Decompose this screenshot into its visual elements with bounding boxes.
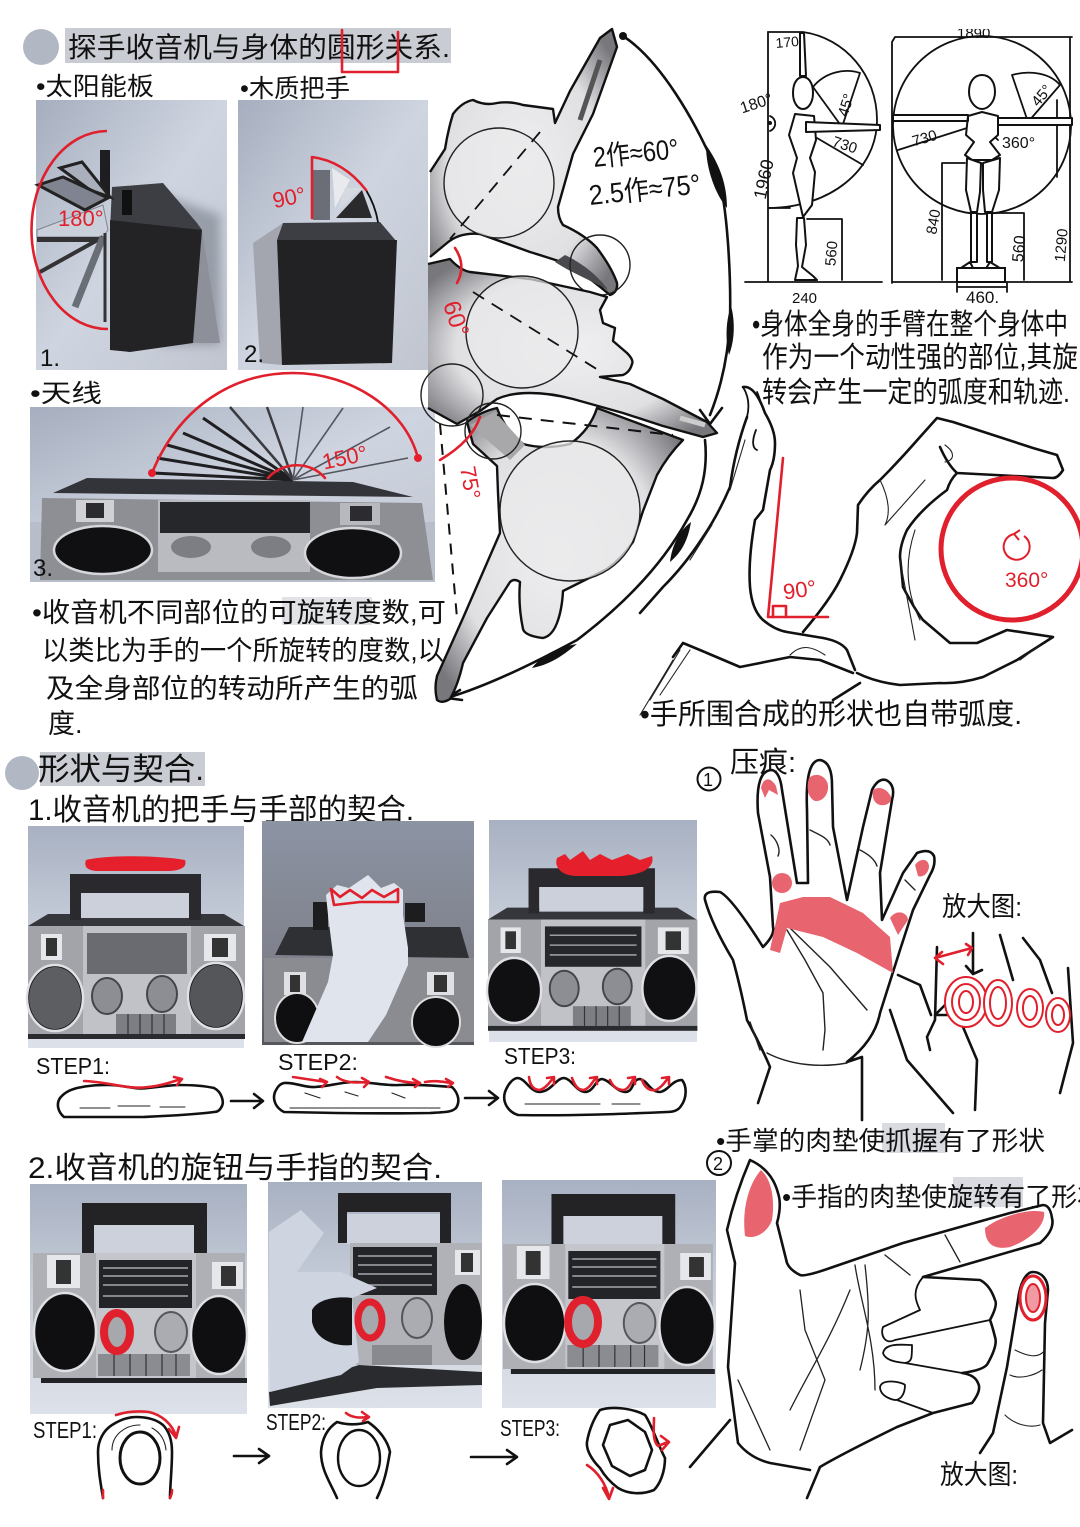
hand drawing: middle hand bbox=[421, 248, 717, 437]
dimension labels side view: 45° bbox=[835, 92, 858, 119]
arrow knob step 2 to 3 bbox=[471, 1450, 517, 1464]
label: enlarged view 2: 放大图: bbox=[940, 1460, 1018, 1490]
hand drawing: L-shaped and circle-shaped hand bbox=[640, 387, 1080, 715]
photo 1: solar panel rotation bbox=[31, 100, 227, 372]
diagram: mannequin front view bbox=[892, 18, 1072, 307]
subheading 1: 1.收音机的把手与手部的契合. bbox=[28, 794, 414, 827]
text block: radio rotation analogy bbox=[32, 597, 446, 739]
step 3 label and knob shape bbox=[500, 1408, 669, 1499]
label: wooden handle: •木质把手 bbox=[240, 75, 350, 103]
step 3 label and shape bbox=[504, 1043, 686, 1115]
label: antenna: •天线 bbox=[30, 380, 102, 408]
step 3 label and knob shape: STEP3: bbox=[500, 1415, 560, 1441]
dimension labels front view: 360° bbox=[1002, 135, 1035, 152]
text block: radio rotation analogy: •收音机不同部位的可旋转度数,可 bbox=[32, 598, 446, 628]
subheading 2: 2.收音机的旋钮与手指的契合. bbox=[28, 1152, 442, 1185]
dimension labels side view: 240 bbox=[792, 290, 817, 307]
diagram: mannequin front view: 1890 bbox=[957, 25, 990, 42]
angle 180: 180° bbox=[58, 206, 104, 231]
section heading: hand and radio circular relationship: 探手收音机与身体的圆形关系. bbox=[68, 32, 450, 63]
step 2 label and knob shape bbox=[266, 1409, 390, 1498]
label: pressure marks: 压痕: bbox=[730, 746, 796, 779]
dimension labels side view: 1960 bbox=[750, 158, 778, 201]
label: enlarged view: 放大图: bbox=[942, 892, 1022, 922]
label: pressure marks bbox=[698, 746, 796, 790]
hand drawing: bottom hand bbox=[436, 403, 683, 702]
label: pressure marks: 1 bbox=[703, 770, 713, 790]
hand drawing: palm with pressure marks bbox=[705, 760, 934, 1120]
text block: radio rotation analogy: 及全身部位的转动所产生的弧 bbox=[46, 674, 418, 704]
dimension labels front view: 1290 bbox=[1052, 228, 1072, 263]
photo number 1: 1. bbox=[40, 345, 60, 372]
photo: handle step 2 bbox=[262, 821, 474, 1047]
step 1 label and knob shape: STEP1: bbox=[33, 1417, 97, 1443]
section heading: shape and fit: 形状与契合. bbox=[38, 752, 204, 787]
angle 150: 150° bbox=[320, 441, 370, 474]
diagram: mannequin side view bbox=[738, 32, 882, 307]
dimension labels front view: 840 bbox=[923, 208, 944, 236]
label: number 2: 2 bbox=[713, 1154, 723, 1174]
arrow step 2 to 3 bbox=[465, 1091, 498, 1105]
photo: handle step 3 bbox=[487, 820, 697, 1042]
text: palm pads give grip shape: •手掌的肉垫使抓握有了形状 bbox=[716, 1126, 1045, 1156]
note: finger rotation degrees: 2.5作≈75° bbox=[587, 168, 702, 211]
note: finger rotation degrees bbox=[587, 133, 702, 211]
dimension labels front view: 560 bbox=[1010, 235, 1029, 263]
angle 90: 90° bbox=[270, 182, 308, 213]
text block: radio rotation analogy: 度. bbox=[48, 709, 83, 739]
dimension labels front view: 45° bbox=[1028, 82, 1056, 110]
caption: hand-enclosed shape: •手所围合成的形状也自带弧度. bbox=[640, 698, 1022, 731]
dimension labels front view: 730 bbox=[910, 127, 939, 150]
hand drawing: enlarged fingertip bbox=[980, 1272, 1072, 1453]
dimension labels side view bbox=[738, 33, 859, 307]
angle 60: 60° bbox=[437, 297, 474, 340]
big arc connecting the hands bbox=[440, 32, 734, 700]
step 1 label and knob shape bbox=[33, 1411, 179, 1498]
dimension labels side view: 560 bbox=[822, 240, 841, 267]
dimension labels side view: 180° bbox=[738, 91, 775, 117]
hand drawing: enlarged finger pads bbox=[890, 933, 1073, 1113]
step 1 label and shape: STEP1: bbox=[36, 1053, 110, 1079]
note: finger rotation degrees: 2作≈60° bbox=[591, 133, 680, 173]
photo 3: antenna rotation bbox=[30, 373, 435, 582]
photo number 2: 2. bbox=[244, 341, 264, 368]
dimension labels side view: 170 bbox=[775, 33, 800, 51]
arrow step 1 to 2 bbox=[231, 1094, 263, 1108]
photo: handle step 1 bbox=[27, 826, 245, 1048]
section heading: hand and radio circular relationship bbox=[23, 28, 451, 72]
step 1 label and shape bbox=[36, 1053, 223, 1117]
angle 75: 75° bbox=[455, 464, 486, 501]
dimension labels front view bbox=[910, 82, 1072, 307]
hand drawing: top hand bbox=[430, 29, 630, 295]
photo: knob step 3 bbox=[502, 1180, 716, 1408]
dimension labels front view: 460. bbox=[966, 288, 999, 307]
step 3 label and shape: STEP3: bbox=[504, 1043, 576, 1069]
label: solar panel: •太阳能板 bbox=[36, 73, 154, 101]
text block: radio rotation analogy: 以类比为手的一个所旋转的度数,以 bbox=[42, 636, 444, 666]
step 2 label and shape bbox=[274, 1049, 458, 1113]
photo 2: handle rotation bbox=[238, 100, 428, 370]
label: number 2 bbox=[707, 1151, 731, 1175]
photo: knob step 2 bbox=[268, 1182, 482, 1408]
angle 90: 90° bbox=[781, 575, 818, 605]
hand drawing: pointing hand bbox=[690, 1160, 1052, 1498]
arrow knob step 1 to 2 bbox=[234, 1449, 269, 1463]
photo number 3: 3. bbox=[33, 555, 53, 582]
step 2 label and shape: STEP2: bbox=[278, 1049, 358, 1075]
angle 360: 360° bbox=[1005, 569, 1048, 592]
step 2 label and knob shape: STEP2: bbox=[266, 1409, 326, 1435]
text block: arm rotation bbox=[752, 308, 1078, 409]
dimension labels side view: 730 bbox=[830, 133, 859, 157]
photo: knob step 1 bbox=[30, 1184, 247, 1414]
